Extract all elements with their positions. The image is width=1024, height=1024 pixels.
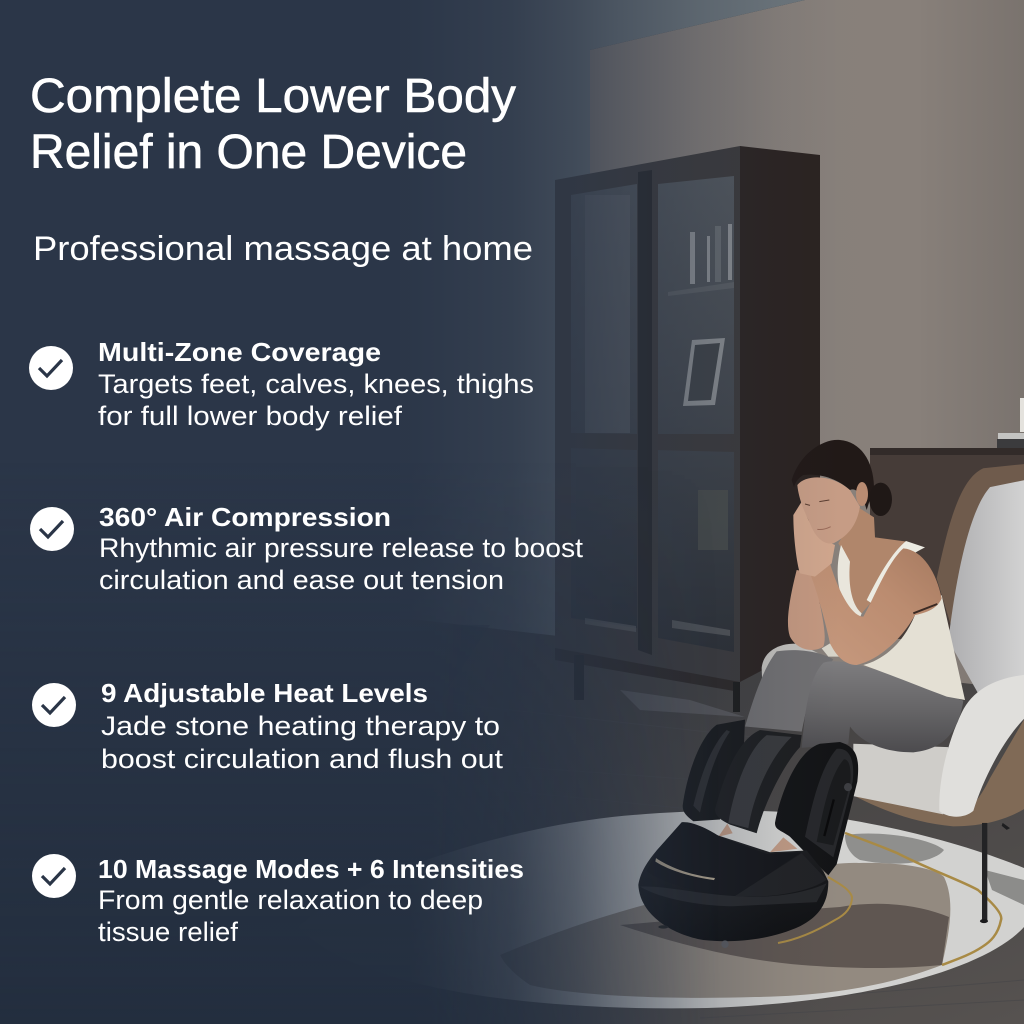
rug shadow bbox=[620, 904, 949, 968]
feet bbox=[718, 824, 733, 837]
feature: massage modes: From gentle relaxation to deep bbox=[98, 885, 483, 915]
rug corner patch bbox=[985, 870, 1024, 905]
lower scene: chair, legs and massager bbox=[638, 464, 1024, 948]
right strap bbox=[867, 541, 925, 603]
feature: multi-zone coverage: for full lower body relief bbox=[98, 401, 403, 431]
title: Relief in One Device bbox=[30, 126, 467, 179]
rug bbox=[299, 811, 1024, 1008]
armrest behind leg bbox=[762, 644, 827, 723]
subtitle: Professional massage at home bbox=[33, 230, 533, 268]
feature: massage modes bbox=[32, 854, 524, 947]
hair bbox=[792, 440, 874, 510]
massager base bbox=[638, 822, 828, 948]
woman upper body bbox=[788, 440, 965, 700]
hands bbox=[793, 502, 835, 577]
floor boards bbox=[420, 700, 1024, 1018]
faint background furniture bbox=[0, 575, 490, 700]
feature: air compression: 360° Air Compression bbox=[99, 502, 391, 532]
tank top body bbox=[863, 595, 965, 700]
facial features bbox=[805, 500, 831, 530]
check icon bbox=[29, 346, 73, 390]
feature: multi-zone coverage: Multi-Zone Coverage bbox=[98, 337, 381, 367]
left strap bbox=[838, 545, 862, 622]
underarm shadow bbox=[913, 604, 937, 613]
front arm bbox=[810, 548, 942, 665]
lower-left darkening bbox=[0, 813, 687, 1024]
feature: massage modes: 10 Massage Modes + 6 Intensities bbox=[98, 854, 524, 884]
back thigh bbox=[745, 650, 833, 732]
title bbox=[30, 70, 516, 179]
rug taupe shape bbox=[500, 863, 950, 998]
feature: heat levels: boost circulation and flush out bbox=[101, 744, 504, 774]
feature: heat levels: 9 Adjustable Heat Levels bbox=[101, 678, 428, 708]
wall bbox=[590, 0, 1024, 720]
neck and chest bbox=[838, 508, 907, 613]
ear bbox=[856, 482, 868, 506]
feature: air compression: Rhythmic air pressure release to boost bbox=[99, 533, 584, 563]
left wall and ceiling bbox=[400, 0, 805, 720]
rug grey patch bbox=[845, 833, 944, 864]
back forearm bbox=[788, 570, 825, 650]
armchair bbox=[853, 464, 1024, 923]
title: Complete Lower Body bbox=[30, 70, 516, 123]
feature: heat levels bbox=[32, 678, 504, 774]
feature: multi-zone coverage: Targets feet, calves, knees, thighs bbox=[98, 369, 534, 399]
feature: air compression: circulation and ease out tension bbox=[99, 565, 504, 595]
massager sleeves bbox=[683, 720, 858, 875]
feature: heat levels: Jade stone heating therapy to bbox=[101, 711, 500, 741]
front leg and thigh bbox=[802, 661, 963, 752]
face bbox=[797, 477, 860, 544]
wooden floor bbox=[0, 600, 1024, 1024]
feature: massage modes: tissue relief bbox=[98, 917, 239, 947]
check icon bbox=[32, 683, 76, 727]
sideboard bbox=[870, 398, 1024, 639]
check icon bbox=[30, 507, 74, 551]
feature: air compression bbox=[30, 502, 584, 595]
cabinet bbox=[555, 146, 820, 712]
feature: multi-zone coverage bbox=[29, 337, 534, 431]
check icon bbox=[32, 854, 76, 898]
floor light patch bbox=[620, 690, 745, 717]
